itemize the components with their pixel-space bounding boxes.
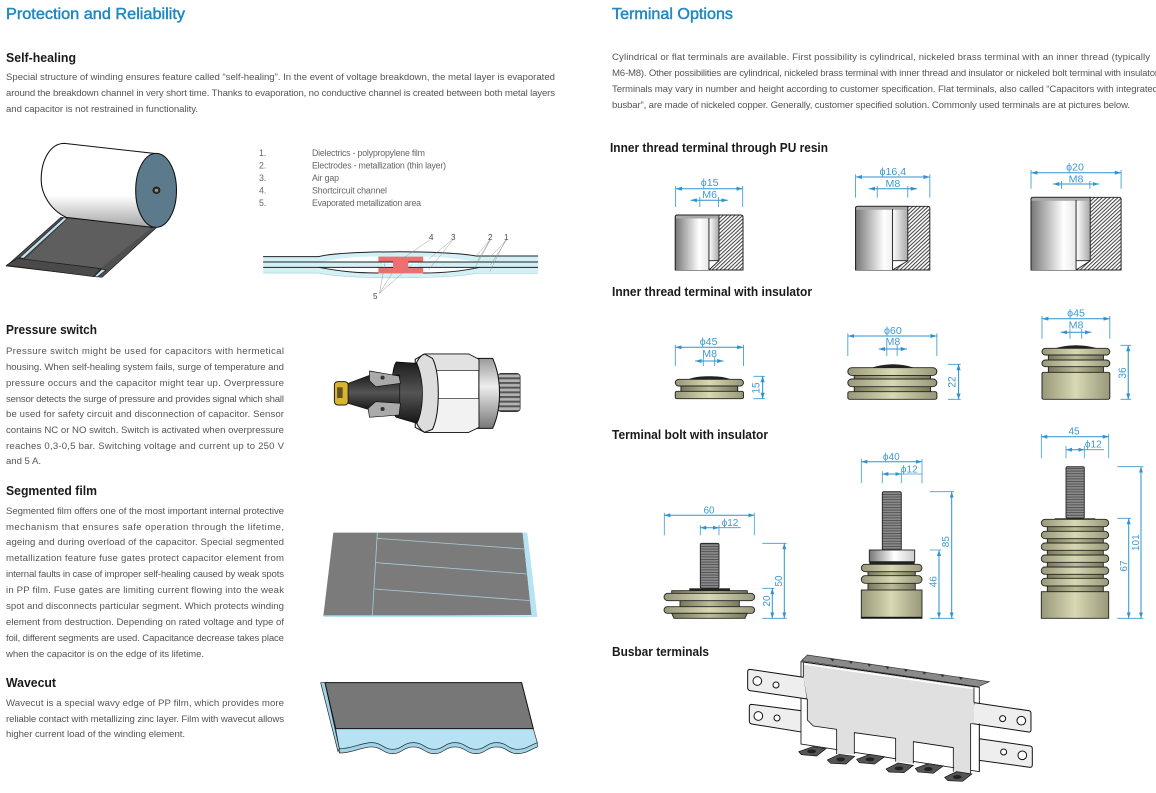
heading: self-healing: Self-healing	[6, 50, 76, 65]
drawing: insulator height 15, diameter 45	[675, 337, 765, 399]
text: wavecut description	[6, 698, 284, 740]
legend: numbered parts list	[259, 148, 446, 208]
text: segmented film description: in PP film. Fuse gates are limiting current flowing into the weak	[6, 585, 284, 596]
drawing: M8 terminal, diameter 16.4: M8	[885, 179, 901, 190]
legend: numbered parts list: Shortcircuit channel	[312, 186, 387, 196]
text: terminal options description: Terminals may vary in number and height according to customer specification. Flat terminals, also called “Capacitors with integrated	[612, 84, 1156, 95]
drawing: insulator height 15, diameter 45: 15	[752, 382, 763, 394]
drawing: M8 terminal, diameter 20: M8	[1069, 175, 1084, 185]
diagram: film breakdown cross-section: 3	[451, 233, 456, 242]
text: segmented film description: spot and disconnects particular segment. Which protects winding	[6, 601, 284, 612]
heading: terminal bolt with insulator: Terminal bolt with insulator	[612, 427, 768, 442]
drawing: M8 terminal, diameter 20	[1031, 163, 1121, 270]
diagram: film breakdown cross-section	[263, 233, 538, 301]
legend: numbered parts list: 5.	[259, 198, 266, 208]
text: pressure switch description: be used for safety circuit and disconnection of capacitor. Sensor	[6, 409, 285, 420]
legend: numbered parts list: Dielectrics - polypropylene film	[312, 148, 425, 158]
drawing: bolt height 85, diameter 40: ϕ12	[901, 465, 918, 476]
drawing: bolt height 101, width 45: 101	[1131, 534, 1142, 551]
legend: numbered parts list: 1.	[259, 148, 266, 158]
icon: film roll	[6, 143, 176, 277]
drawing: insulator height 36, diameter 45	[1042, 309, 1131, 399]
text: pressure switch description: Pressure switch might be used for capacitors with hermetical	[6, 346, 284, 357]
text: pressure switch description: contains NC or NO switch. Switch is activated when overpressure	[6, 425, 284, 436]
drawing: bolt height 101, width 45: ϕ12	[1085, 439, 1102, 450]
drawing: M8 terminal, diameter 20: ϕ20	[1066, 163, 1084, 174]
text: terminal options description: Cylindrical or flat terminals are available. First possibility is cylindrical, nickeled brass terminal with an inner thread (typically	[612, 52, 1150, 63]
text: terminal options description: busbar”, are made of nickeled copper. Generally, customer specified solution. Commonly used terminals are at pictures below.	[612, 100, 1130, 111]
text: pressure switch description: sensor detects the surge of pressure and provides signal which shall	[6, 394, 284, 405]
drawing: bolt height 50, width 60: 50	[774, 575, 785, 587]
legend: numbered parts list: Evaporated metallization area	[312, 198, 421, 208]
text: self-healing description: and capacitor is not restrained in functionality.	[6, 104, 198, 115]
heading: pressure switch: Pressure switch	[6, 322, 97, 337]
heading: inner thread with insulator: Inner thread terminal with insulator	[612, 284, 812, 299]
text: wavecut description: reliable contact with metallizing zinc layer. Film with wavecut allows	[6, 714, 284, 725]
legend: numbered parts list: 2.	[259, 160, 266, 170]
drawing: insulator height 36, diameter 45: M8	[1069, 321, 1084, 332]
panel: terminal options	[610, 6, 1156, 781]
heading: busbar terminals: Busbar terminals	[612, 644, 709, 659]
title: protection and reliability: Protection and Reliability	[6, 6, 185, 23]
section: terminal bolt with insulator	[612, 426, 1143, 618]
text: wavecut description: Wavecut is a special wavy edge of PP film, which provides more	[6, 698, 284, 709]
drawing: bolt height 85, diameter 40: ϕ40	[883, 452, 900, 463]
text: pressure switch description: housing. When self-healing system fails, surge of temperature and	[6, 362, 284, 373]
drawing: bolt height 85, diameter 40: 46	[928, 576, 940, 587]
drawing: insulator height 22, diameter 60: 22	[947, 376, 959, 388]
text: segmented film description: metallization feature fuse gates protect capacitor element from	[6, 553, 284, 564]
text: pressure switch description	[6, 346, 285, 467]
text: segmented film description: when the capacitor is on the edge of its lifetime.	[5, 649, 204, 660]
legend: numbered parts list: Electrodes - metallization (thin layer)	[312, 160, 446, 170]
drawing: insulator height 22, diameter 60	[848, 326, 961, 399]
drawing: insulator height 15, diameter 45: ϕ45	[700, 337, 718, 348]
drawing: bolt height 101, width 45: 45	[1068, 426, 1080, 437]
diagram: film breakdown cross-section: 4	[429, 233, 434, 242]
drawing: bolt height 50, width 60: 20	[762, 595, 773, 607]
drawing: bolt height 85, diameter 40: 85	[941, 536, 952, 547]
diagram: film breakdown cross-section: 5	[373, 292, 378, 301]
drawing: bolt height 101, width 45: 67	[1119, 560, 1130, 572]
drawing: insulator height 15, diameter 45: M8	[702, 349, 717, 360]
text: segmented film description: mechanism that ensures safe operation through the lifetime,	[6, 522, 284, 533]
text: pressure switch description: reaches 0,3-0,5 bar. Switching voltage and current up to 250 V	[6, 441, 285, 452]
drawing: M6 terminal, diameter 15: M6	[702, 190, 717, 201]
heading: segmented film: Segmented film	[6, 483, 97, 498]
icon: wavecut film	[321, 683, 537, 754]
drawing: busbar assembly	[748, 655, 1032, 781]
text: wavecut description: higher current load of the winding element.	[6, 729, 185, 740]
section: pressure switch	[6, 322, 520, 467]
icon: segmented film sheet	[323, 533, 537, 617]
icon: pressure switch	[334, 354, 520, 432]
drawing: bolt height 85, diameter 40	[861, 452, 954, 618]
drawing: bolt height 50, width 60: 60	[703, 505, 715, 516]
text: terminal options description: M6-M8). Other possibilities are cylindrical, nickeled brass terminal with inner thread and insulator or nickeled bolt terminal with insulator.	[612, 68, 1156, 79]
drawing: insulator height 36, diameter 45: 36	[1118, 367, 1129, 379]
section: inner thread terminal through PU resin	[610, 140, 1121, 270]
text: segmented film description: Segmented film offers one of the most important internal protective	[6, 506, 284, 517]
drawing: M6 terminal, diameter 15	[675, 178, 743, 270]
drawing: M8 terminal, diameter 16.4: ϕ16,4	[880, 167, 906, 178]
section: segmented film	[5, 483, 537, 660]
text: segmented film description: ageing and during overload of the capacitor. Special segmented	[6, 537, 284, 548]
section: wavecut	[6, 675, 537, 754]
heading: inner thread through PU resin: Inner thread terminal through PU resin	[610, 140, 828, 155]
legend: numbered parts list: 3.	[259, 173, 266, 183]
heading: wavecut: Wavecut	[6, 675, 57, 690]
text: terminal options description	[612, 52, 1156, 111]
legend: numbered parts list: Air gap	[312, 173, 339, 183]
text: segmented film description	[5, 506, 284, 660]
legend: numbered parts list: 4.	[259, 186, 266, 196]
drawing: bolt height 50, width 60: ϕ12	[722, 518, 739, 529]
drawing: insulator height 22, diameter 60: ϕ60	[884, 326, 902, 337]
drawing: M6 terminal, diameter 15: ϕ15	[701, 178, 719, 189]
section: busbar terminals	[612, 644, 1032, 781]
text: self-healing description: around the breakdown channel in very short time. Thanks to evaporation, no conductive channel is created between both metal layers	[6, 88, 555, 99]
title: terminal options: Terminal Options	[612, 6, 733, 23]
section: inner thread terminal with insulator	[612, 284, 1131, 399]
diagram: film breakdown cross-section: 2	[488, 233, 493, 242]
drawing: insulator height 36, diameter 45: ϕ45	[1067, 309, 1085, 320]
drawing: insulator height 22, diameter 60: M8	[885, 337, 901, 348]
section: self-healing	[6, 50, 555, 301]
diagram: film breakdown cross-section: 1	[504, 233, 509, 242]
text: self-healing description	[6, 72, 555, 115]
panel: protection and reliability	[5, 6, 555, 754]
text: segmented film description: foil, different segments are used. Capacitance decrease takes place	[6, 633, 284, 644]
drawing: bolt height 50, width 60	[664, 505, 787, 618]
drawing: bolt height 101, width 45	[1041, 426, 1143, 618]
text: pressure switch description: pressure occurs and the capacitor might tear up. Overpressure	[6, 378, 284, 389]
text: self-healing description: Special structure of winding ensures feature called “self-healing”. In the event of voltage breakdown, the metal layer is evaporated	[6, 72, 555, 83]
drawing: M8 terminal, diameter 16.4	[856, 167, 930, 270]
text: pressure switch description: and 5 A.	[6, 456, 41, 467]
text: segmented film description: internal faults in case of improper self-healing caused by weak spots	[6, 569, 284, 580]
text: segmented film description: element from destruction. Depending on rated voltage and type of	[6, 617, 284, 628]
